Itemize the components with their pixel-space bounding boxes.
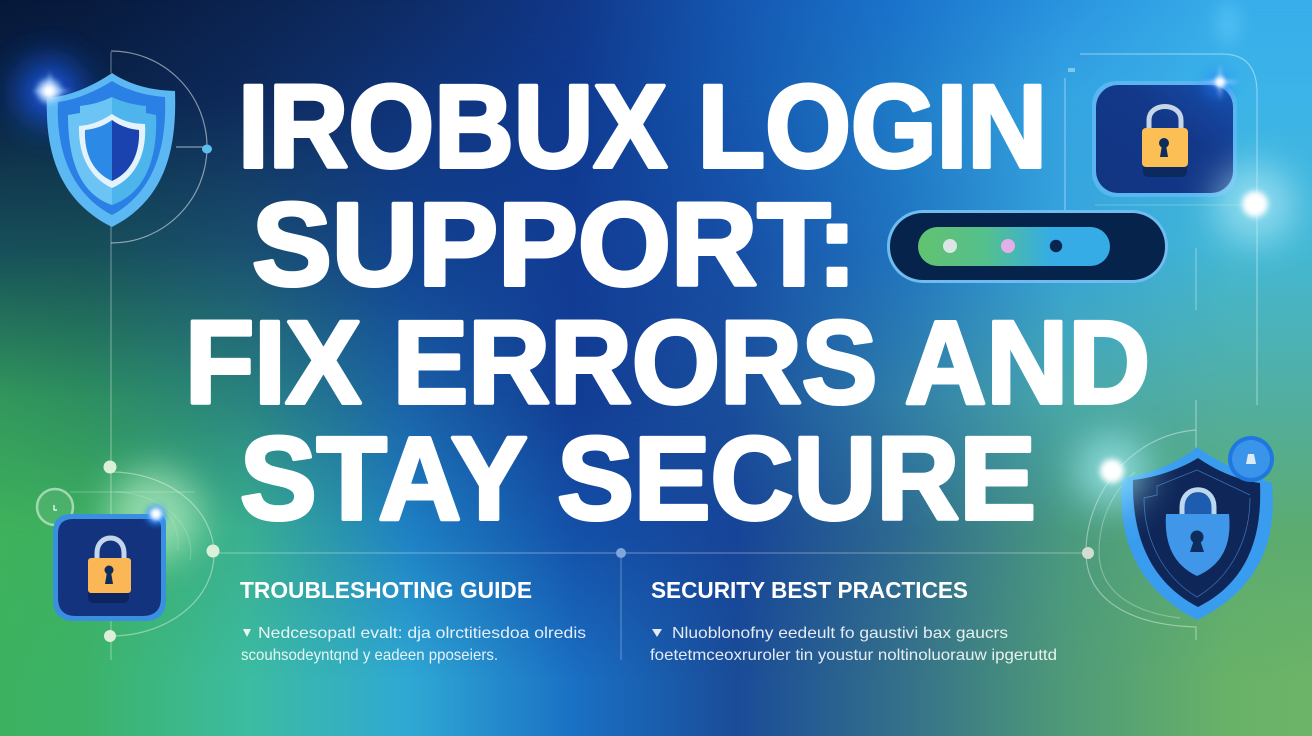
icon: star top left [37, 79, 61, 103]
icon: glow top left [20, 62, 80, 122]
small frame square [1068, 68, 1075, 72]
body text: security [650, 625, 1057, 664]
icon: lock tile bottom left [37, 469, 201, 621]
password pill [887, 210, 1168, 283]
heading: troubleshooting: TROUBLESHOTING GUIDE [240, 577, 532, 603]
panel: troubleshooting guide [240, 577, 586, 664]
heading: security: SECURITY BEST PRACTICES [651, 577, 968, 603]
body text: troubleshooting: Nedcesopatl evalt: dja olrctitiesdoa olredis [258, 625, 586, 642]
title [185, 61, 1150, 545]
body text: troubleshooting: scouhsodeyntqnd y eadeen pposeiers. [241, 647, 498, 664]
icon: blue shield [47, 73, 175, 227]
panel: security best practices [650, 577, 1057, 664]
body text: security: Nluoblonofny eedeult fo gaustivi bax gaucrs [672, 625, 1008, 642]
title: STAY SECURE [240, 413, 1036, 545]
body text: troubleshooting [241, 625, 586, 664]
title: SUPPORT: [252, 179, 857, 311]
title: FIX ERRORS AND [185, 297, 1150, 429]
title: IROBUX LOGIN [238, 61, 1047, 193]
icon: glow right [1215, 164, 1295, 244]
body text: security: foetetmceoxruroler tin youstur noltinoluorauw ipgeruttd [650, 647, 1057, 664]
top light blob [1216, 4, 1240, 44]
circuit lines [70, 51, 1257, 660]
node dots [104, 144, 1094, 642]
icon: lock shield bottom right [1076, 435, 1274, 620]
icon: lock tile top right [1092, 64, 1240, 197]
